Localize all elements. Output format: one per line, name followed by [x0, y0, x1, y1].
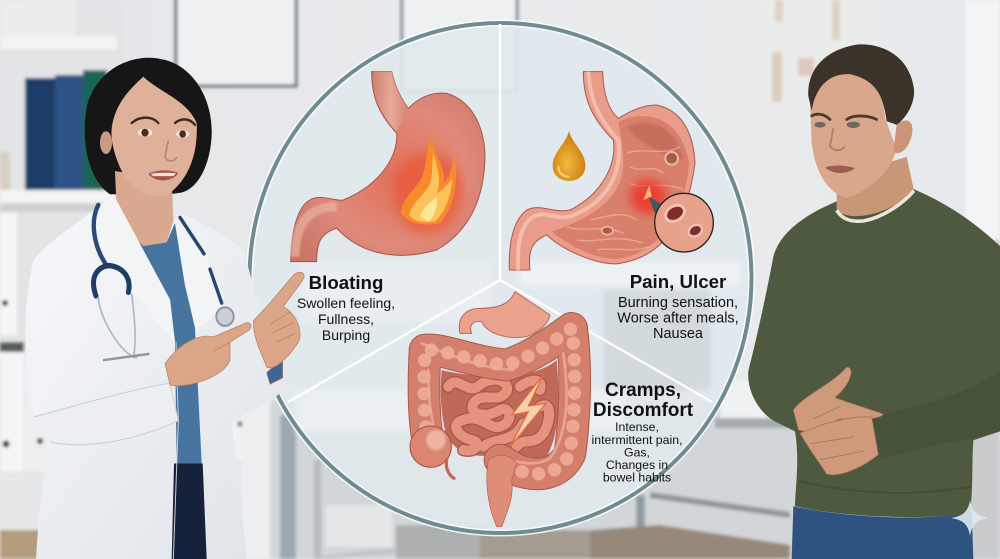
icon: acid drop: [553, 131, 585, 181]
icon: sparkle watermark: [951, 500, 989, 536]
flame glow: [393, 152, 463, 235]
label: bloating: Bloating: [309, 272, 383, 293]
flame: [401, 137, 456, 225]
jeans: [792, 506, 973, 559]
magnifier inset: [648, 193, 713, 252]
hands on stomach: [793, 367, 883, 475]
label: pain, ulcer: Burning sensation,: [618, 295, 738, 311]
cecum: [410, 426, 451, 467]
label: bloating: Swollen feeling,: [297, 295, 395, 311]
framed certificates: [176, 0, 517, 91]
stomach with ulcers (pain): [509, 72, 713, 270]
pointing hands: [165, 272, 304, 386]
label: pain, ulcer: Pain, Ulcer: [630, 271, 726, 292]
large intestine: [422, 328, 575, 474]
label: cramps, discomfort: Gas,: [624, 446, 650, 460]
label: cramps, discomfort: [592, 380, 694, 484]
face: [111, 77, 197, 196]
lab coat: [25, 194, 288, 559]
icon: lightning bolt: [510, 375, 546, 447]
facial features: [812, 114, 877, 173]
label: pain, ulcer: Worse after meals,: [617, 310, 739, 326]
doctor figure: [25, 58, 304, 559]
neck: [115, 171, 173, 246]
label: cramps, discomfort: Changes in: [606, 458, 668, 472]
rectum: [487, 455, 517, 527]
lens glass: [250, 23, 752, 533]
trousers: [172, 463, 207, 559]
stethoscope: [94, 205, 234, 360]
blouse: [125, 223, 202, 463]
label: cramps, discomfort: intermittent pain,: [592, 433, 682, 447]
patient figure: [748, 44, 1000, 559]
stomach with flame (bloating): [291, 72, 485, 262]
small stomach: [459, 292, 550, 338]
small intestine mass: [441, 360, 559, 458]
facial features: [132, 118, 195, 180]
label: cramps, discomfort: Discomfort: [593, 400, 694, 421]
label: cramps, discomfort: Cramps,: [605, 380, 681, 401]
lens rim: [250, 23, 752, 533]
sweater: [748, 189, 1000, 517]
label: cramps, discomfort: Intense,: [615, 420, 659, 434]
bookshelf: [0, 0, 270, 559]
desk and lower room: [270, 240, 1000, 559]
label: cramps, discomfort: bowel habits: [603, 470, 671, 484]
circular symptom panel: [250, 23, 752, 533]
blurred clinic bench seen through lens: [295, 262, 740, 432]
label: bloating: [297, 272, 395, 343]
head: [810, 64, 897, 198]
coat lapels: [97, 194, 222, 342]
label: bloating: Burping: [322, 327, 370, 343]
intestines with lightning bolt: [410, 292, 575, 527]
label: pain, ulcer: Nausea: [653, 326, 704, 342]
ulcer hot spot: [630, 179, 667, 214]
segment dividers: [288, 24, 712, 402]
neck and t-shirt collar: [837, 157, 914, 216]
label: pain, ulcer: [617, 271, 739, 342]
appendix: [446, 459, 454, 478]
anatomy poster: [755, 0, 880, 122]
hair: [85, 58, 212, 194]
label: bloating: Fullness,: [318, 311, 374, 327]
